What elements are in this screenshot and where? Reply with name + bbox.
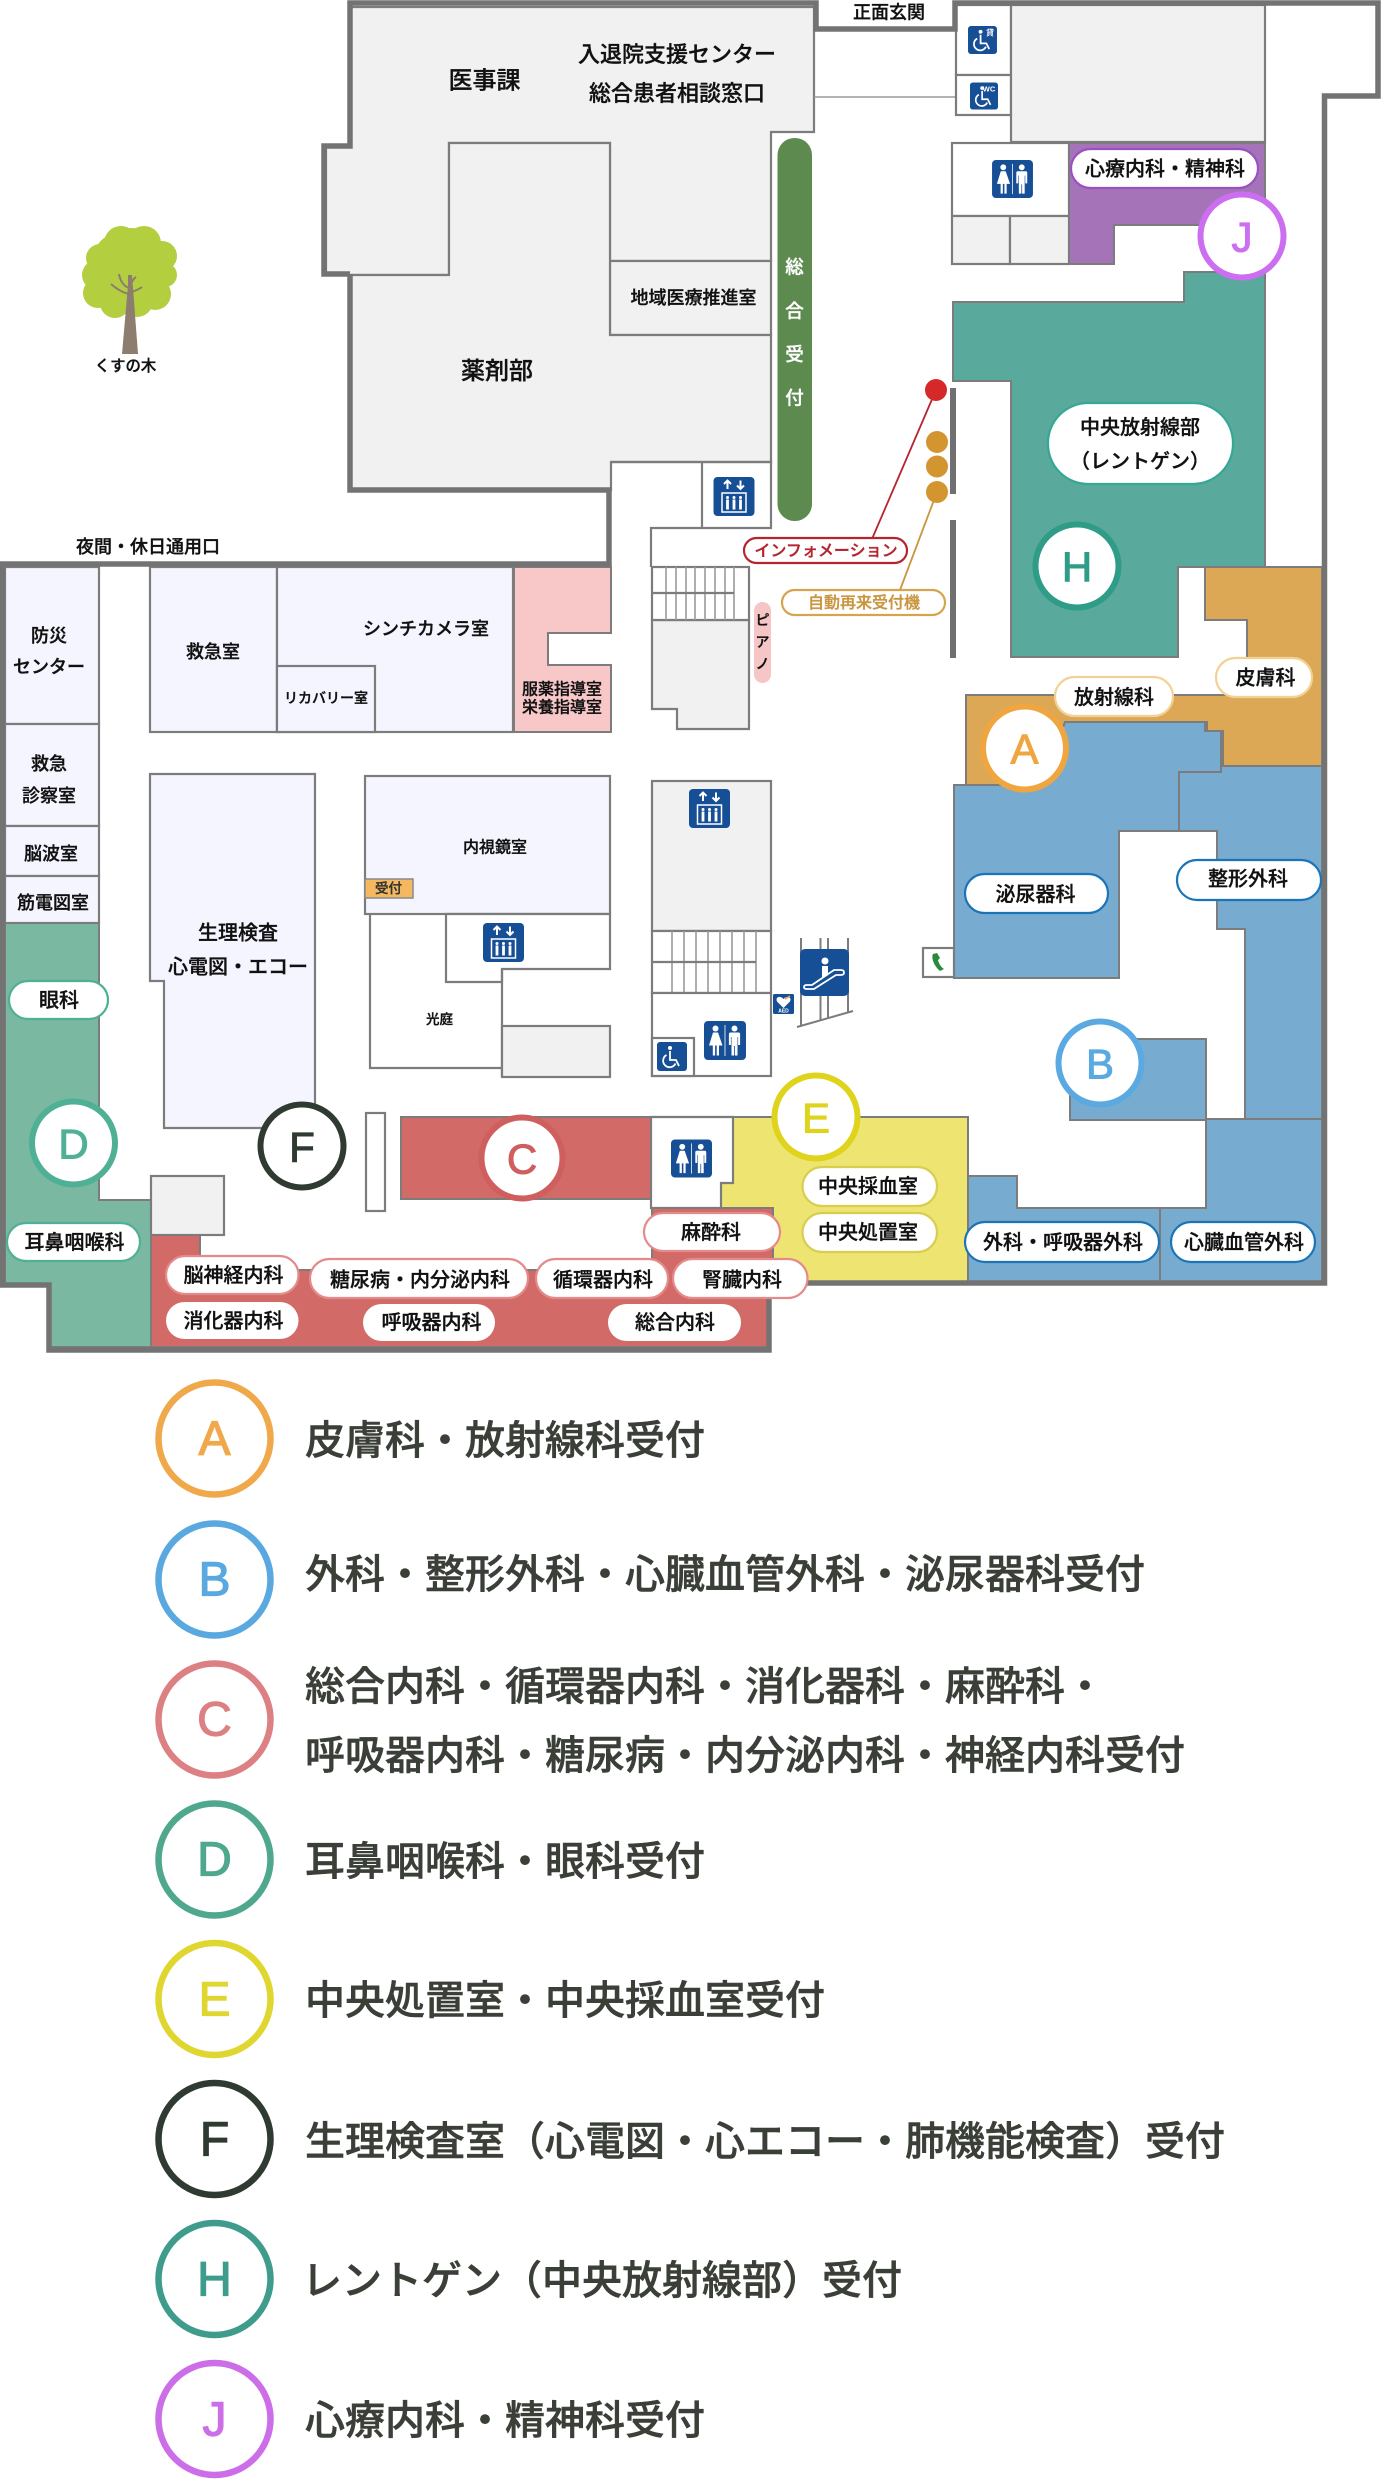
elevator lobby top [611, 462, 771, 567]
piano: ア [756, 634, 770, 650]
room: 薬剤部 [350, 143, 771, 490]
icon: wheelchair WC: WC [983, 84, 996, 94]
room: tree and grounds background [0, 0, 1381, 1360]
room: 救急室 [150, 567, 277, 732]
escalator rails [797, 938, 853, 1027]
marker B: B [1086, 1040, 1114, 1088]
marker A [983, 706, 1066, 790]
accessible WC room [956, 75, 1011, 115]
courtyard outline [370, 914, 502, 1068]
label: 呼吸器内科 [363, 1304, 495, 1341]
AED icon [773, 994, 794, 1014]
legend item B [158, 1524, 1145, 1636]
grey box by courtyard [502, 1026, 610, 1077]
legend item D: D [197, 1834, 232, 1886]
department area: 心臓血管外科 [1160, 1119, 1322, 1283]
text: 医事課: 医事課 [448, 68, 520, 94]
legend item C [158, 1664, 1185, 1778]
marker E [774, 1076, 858, 1158]
department area: 耳鼻咽喉科・眼科 [5, 923, 151, 1347]
department area: 整形外科 [1179, 766, 1322, 1119]
legend item C: 総合内科・循環器内科・消化器科・麻酔科・ [305, 1665, 1105, 1709]
department area: 内科 lower [151, 1208, 773, 1347]
room: 内視鏡室 [365, 776, 610, 914]
label: 整形外科 [1177, 860, 1321, 900]
icon: toilets stairs [704, 1021, 746, 1060]
legend item E [158, 1943, 825, 2055]
text: 受付: 受付 [375, 880, 402, 896]
room: 生理検査 [150, 774, 315, 1128]
label: 耳鼻咽喉科 [7, 1223, 140, 1261]
room: 地域医療推進室 [610, 261, 771, 335]
room: 防災センター [5, 567, 99, 724]
label: 中央処置室 [802, 1213, 937, 1252]
label: 総合内科 [608, 1304, 741, 1341]
label: 腎臓内科: 腎臓内科 [702, 1268, 782, 1292]
legend item J: J [202, 2394, 226, 2446]
label: 整形外科: 整形外科 [1208, 868, 1288, 890]
legend item J [158, 2363, 705, 2475]
interior wall bar lower [950, 520, 956, 658]
text: 内視鏡室: 内視鏡室 [463, 838, 527, 856]
総合受付 counter: 受 [785, 344, 804, 365]
label: 放射線科: 放射線科 [1074, 686, 1154, 709]
marker F [260, 1104, 344, 1188]
department area: 内科 corridor [401, 1117, 651, 1199]
label: 心療内科・精神科 [1071, 149, 1258, 188]
toilet block top [952, 143, 1069, 216]
icon: elevator core [689, 789, 730, 828]
department area: 外科・呼吸器外科 [968, 1176, 1160, 1283]
legend item E: 中央処置室・中央採血室受付 [305, 1979, 825, 2023]
room: 救急診察室 [5, 724, 99, 826]
legend item B: B [198, 1554, 231, 1606]
marker C: C [507, 1136, 537, 1182]
marker D: D [58, 1120, 89, 1168]
icon: elevator top [714, 477, 754, 516]
label: 心臓血管外科: 心臓血管外科 [1184, 1231, 1304, 1254]
label: 自動再来受付機 [782, 590, 945, 615]
stairs lower [652, 931, 771, 993]
text: 防災: 防災 [31, 626, 67, 646]
text: 心電図・エコー: 心電図・エコー [168, 956, 308, 978]
label: 中央放射線部（レントゲン）: （レントゲン） [1070, 450, 1210, 473]
text: 薬剤部: 薬剤部 [461, 358, 533, 385]
legend item H: レントゲン（中央放射線部）受付 [302, 2259, 902, 2303]
label: 中央採血室: 中央採血室 [818, 1175, 918, 1198]
marker A: A [1010, 726, 1039, 772]
総合受付 counter: 付 [785, 388, 804, 408]
department area: 中央処置室 [721, 1117, 968, 1283]
stairs upper room [652, 567, 749, 729]
marker H: H [1062, 544, 1092, 590]
text: 夜間・休日通用口: 夜間・休日通用口 [76, 537, 220, 557]
label: 皮膚科: 皮膚科 [1236, 666, 1296, 690]
label: 腎臓内科 [673, 1259, 808, 1298]
room: 筋電図室 [5, 876, 99, 923]
escalator icon [800, 949, 849, 996]
text: 総合患者相談窓口: 総合患者相談窓口 [589, 81, 765, 106]
label: 消化器内科: 消化器内科 [184, 1310, 284, 1332]
text: センター: センター [13, 657, 85, 677]
legend item B: 外科・整形外科・心臓血管外科・泌尿器科受付 [305, 1553, 1145, 1597]
legend item A: A [198, 1412, 231, 1466]
accessible toilet room [956, 5, 1011, 75]
small room right [1010, 216, 1069, 264]
label: 心臓血管外科 [1171, 1222, 1315, 1262]
department area: 皮膚科・放射線科 [966, 567, 1322, 785]
legend item A [158, 1382, 705, 1494]
phone booth [923, 948, 954, 977]
label: 消化器内科 [166, 1302, 298, 1339]
elevator core lower [652, 781, 771, 931]
marker E: E [802, 1094, 830, 1142]
toilet room by stairs [652, 993, 771, 1076]
label: 麻酔科 [644, 1213, 780, 1251]
label: 中央処置室: 中央処置室 [818, 1221, 918, 1244]
label: 麻酔科: 麻酔科 [681, 1221, 741, 1244]
icon: toilets lower [671, 1139, 712, 1178]
legend item E: E [198, 1974, 231, 2026]
icon: phone [932, 953, 944, 971]
text: 生理検査: 生理検査 [198, 922, 278, 944]
marker F: F [289, 1124, 315, 1170]
label: 眼科: 眼科 [39, 989, 79, 1012]
label: 泌尿器科: 泌尿器科 [996, 883, 1076, 906]
room: シンチカメラ室 [277, 567, 513, 732]
総合受付 counter: 合 [785, 300, 804, 322]
text: リカバリー室: リカバリー室 [284, 690, 368, 706]
outer building wall [2, 3, 1378, 1350]
legend item D [158, 1804, 705, 1916]
narrow room [366, 1113, 385, 1211]
label: 循環器内科 [536, 1259, 668, 1298]
grey room top right [1011, 5, 1265, 142]
label: 脳神経内科: 脳神経内科 [184, 1264, 284, 1287]
label: 自動再来受付機: 自動再来受付機 [808, 593, 920, 612]
marker D [32, 1102, 115, 1184]
room: 医事課 / 入退院支援センター [326, 7, 814, 275]
markers: auto reception machines [926, 431, 948, 503]
entrance corridor lines [814, 96, 956, 98]
toilet room lower [651, 1117, 733, 1208]
piano [754, 602, 771, 683]
room: リカバリー室 [277, 666, 375, 732]
icon: toilets top [992, 160, 1033, 198]
marker J: J [1232, 214, 1252, 260]
text: くすの木: くすの木 [95, 357, 157, 375]
text: 診察室: 診察室 [22, 786, 76, 806]
text: 正面玄関: 正面玄関 [853, 2, 925, 22]
marker B [1058, 1022, 1142, 1104]
text: 服薬指導室: 服薬指導室 [522, 680, 602, 698]
grey store room [151, 1176, 224, 1235]
label: 中央放射線部（レントゲン）: 中央放射線部 [1080, 416, 1200, 439]
icon: wheelchair WC [970, 82, 998, 110]
総合受付 counter [778, 138, 812, 521]
legend item J: 心療内科・精神科受付 [305, 2399, 705, 2443]
icon: wheelchair rental [968, 26, 997, 54]
marker C [482, 1118, 562, 1198]
legend item F: 生理検査室（心電図・心エコー・肺機能検査）受付 [305, 2120, 1225, 2164]
icon: wheelchair stairs [657, 1042, 687, 1071]
text: 救急室: 救急室 [186, 642, 240, 662]
text: 入退院支援センター: 入退院支援センター [578, 42, 776, 67]
text: 地域医療推進室: 地域医療推進室 [630, 288, 756, 308]
label: 外科・呼吸器外科: 外科・呼吸器外科 [983, 1231, 1143, 1254]
interior wall bar upper [950, 388, 956, 494]
label: 糖尿病・内分泌内科: 糖尿病・内分泌内科 [330, 1268, 510, 1292]
floor map [0, 0, 1381, 1360]
department area: 泌尿器科 [954, 722, 1221, 978]
label: 糖尿病・内分泌内科 [310, 1259, 528, 1298]
legend item F: F [200, 2114, 229, 2166]
AED icon: AED [778, 1008, 789, 1014]
legend item A: 皮膚科・放射線科受付 [305, 1419, 705, 1463]
text: 脳波室: 脳波室 [24, 844, 78, 864]
icon: camphor tree [82, 226, 177, 354]
内視鏡室 reception [365, 879, 413, 898]
marker: information [925, 379, 947, 401]
piano: ピ [756, 612, 770, 628]
label: 中央放射線部（レントゲン） [1048, 403, 1233, 484]
icon: elevator courtyard [483, 923, 524, 962]
label: インフォメーション: インフォメーション [754, 543, 898, 560]
legend item F [158, 2083, 1225, 2195]
accessible toilet booth [652, 1038, 694, 1076]
label: 中央採血室 [802, 1167, 937, 1206]
room: 脳波室 [5, 826, 99, 876]
label: 心療内科・精神科: 心療内科・精神科 [1085, 158, 1245, 180]
label: 放射線科 [1055, 677, 1173, 716]
department area: 外科 block [1070, 1039, 1206, 1120]
text: 筋電図室: 筋電図室 [17, 893, 89, 913]
legend item H: H [197, 2254, 232, 2306]
marker J [1200, 194, 1284, 278]
label: 外科・呼吸器外科 [965, 1222, 1159, 1262]
icon: wheelchair rental: 貸 [986, 28, 994, 38]
courtyard side wall [501, 969, 503, 1077]
marker H [1036, 524, 1118, 608]
label: 脳神経内科 [166, 1256, 298, 1294]
総合受付 counter: 総 [785, 256, 804, 278]
room: 服薬指導室・栄養指導室 [514, 567, 611, 732]
text: 救急: 救急 [31, 754, 67, 774]
label: 皮膚科 [1216, 658, 1312, 697]
label: 眼科 [9, 981, 108, 1019]
legend [158, 1382, 1225, 2475]
legend item C: C [197, 1694, 232, 1746]
legend item H [158, 2223, 902, 2335]
leader line: auto reception [900, 492, 937, 590]
label: 耳鼻咽喉科: 耳鼻咽喉科 [24, 1231, 124, 1254]
label: インフォメーション [744, 538, 907, 563]
text: 栄養指導室: 栄養指導室 [522, 698, 602, 716]
legend item C: 呼吸器内科・糖尿病・内分泌内科・神経内科受付 [305, 1734, 1185, 1778]
text: 光庭: 光庭 [426, 1012, 453, 1027]
piano: ノ [756, 656, 770, 672]
leader line: information [872, 390, 936, 539]
label: 泌尿器科 [965, 874, 1108, 913]
elevator room [446, 914, 610, 982]
department area: 心療内科・精神科 [1069, 143, 1265, 264]
label: 総合内科: 総合内科 [635, 1311, 715, 1334]
text: シンチカメラ室: シンチカメラ室 [363, 619, 489, 639]
legend item D: 耳鼻咽喉科・眼科受付 [305, 1840, 705, 1884]
department area: 中央放射線部 [953, 272, 1265, 657]
label: 呼吸器内科: 呼吸器内科 [382, 1311, 482, 1334]
label: 循環器内科: 循環器内科 [553, 1268, 653, 1292]
small room left [952, 216, 1010, 264]
